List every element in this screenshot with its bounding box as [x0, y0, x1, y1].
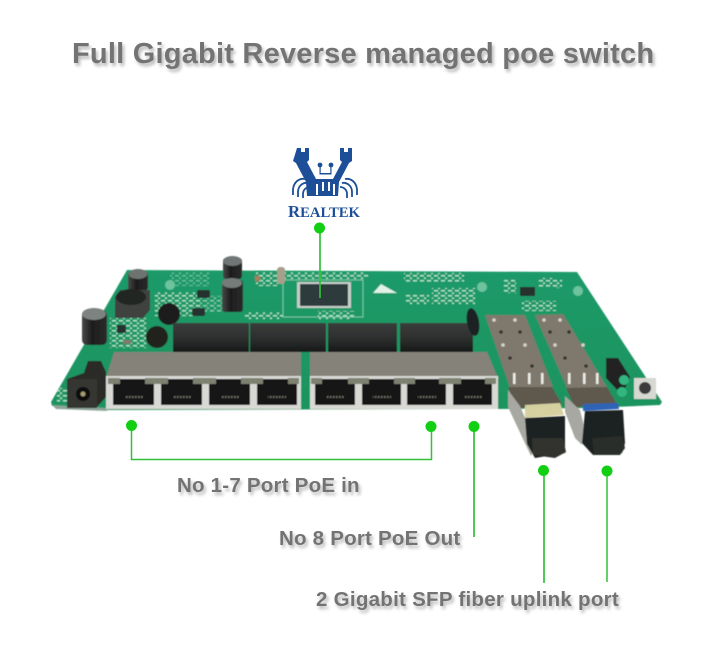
title: Full Gigabit Reverse managed poe switch — [72, 38, 654, 70]
inductor — [115, 289, 150, 318]
RJ45 block: left — [106, 352, 301, 409]
main chip — [297, 282, 351, 308]
board edge — [52, 405, 107, 411]
RJ45 block: right — [310, 352, 498, 409]
label: PoE out port: No 8 Port PoE Out — [279, 527, 460, 550]
label: SFP uplink: 2 Gigabit SFP fiber uplink port — [316, 588, 619, 611]
label: Realtek wordmark: REALTEK — [288, 202, 361, 221]
disc components — [158, 303, 180, 325]
SFP cages — [485, 314, 607, 388]
Realtek chip outline — [283, 280, 363, 317]
callout: Realtek chip pointer — [314, 222, 325, 298]
black component by SFP — [465, 307, 481, 337]
SFP module 1 — [508, 387, 566, 458]
callout: SFP pointers — [538, 465, 612, 583]
transformer blocks — [173, 323, 473, 352]
small components — [117, 276, 535, 344]
reset button and LEDs — [606, 358, 656, 399]
callout: port 8 pointer — [468, 421, 480, 537]
icon: Realtek crab — [293, 148, 352, 196]
resistor — [277, 267, 285, 284]
DC power jack — [67, 361, 106, 408]
capacitors — [82, 256, 243, 345]
switch board photo — [51, 256, 662, 458]
callout: port 1-7 bracket — [126, 420, 436, 460]
silkscreen details — [57, 272, 583, 402]
label: PoE in ports: No 1-7 Port PoE in — [177, 474, 360, 497]
Realtek logo — [288, 148, 361, 221]
SFP module 2 — [565, 387, 625, 455]
circuit board — [51, 270, 662, 410]
